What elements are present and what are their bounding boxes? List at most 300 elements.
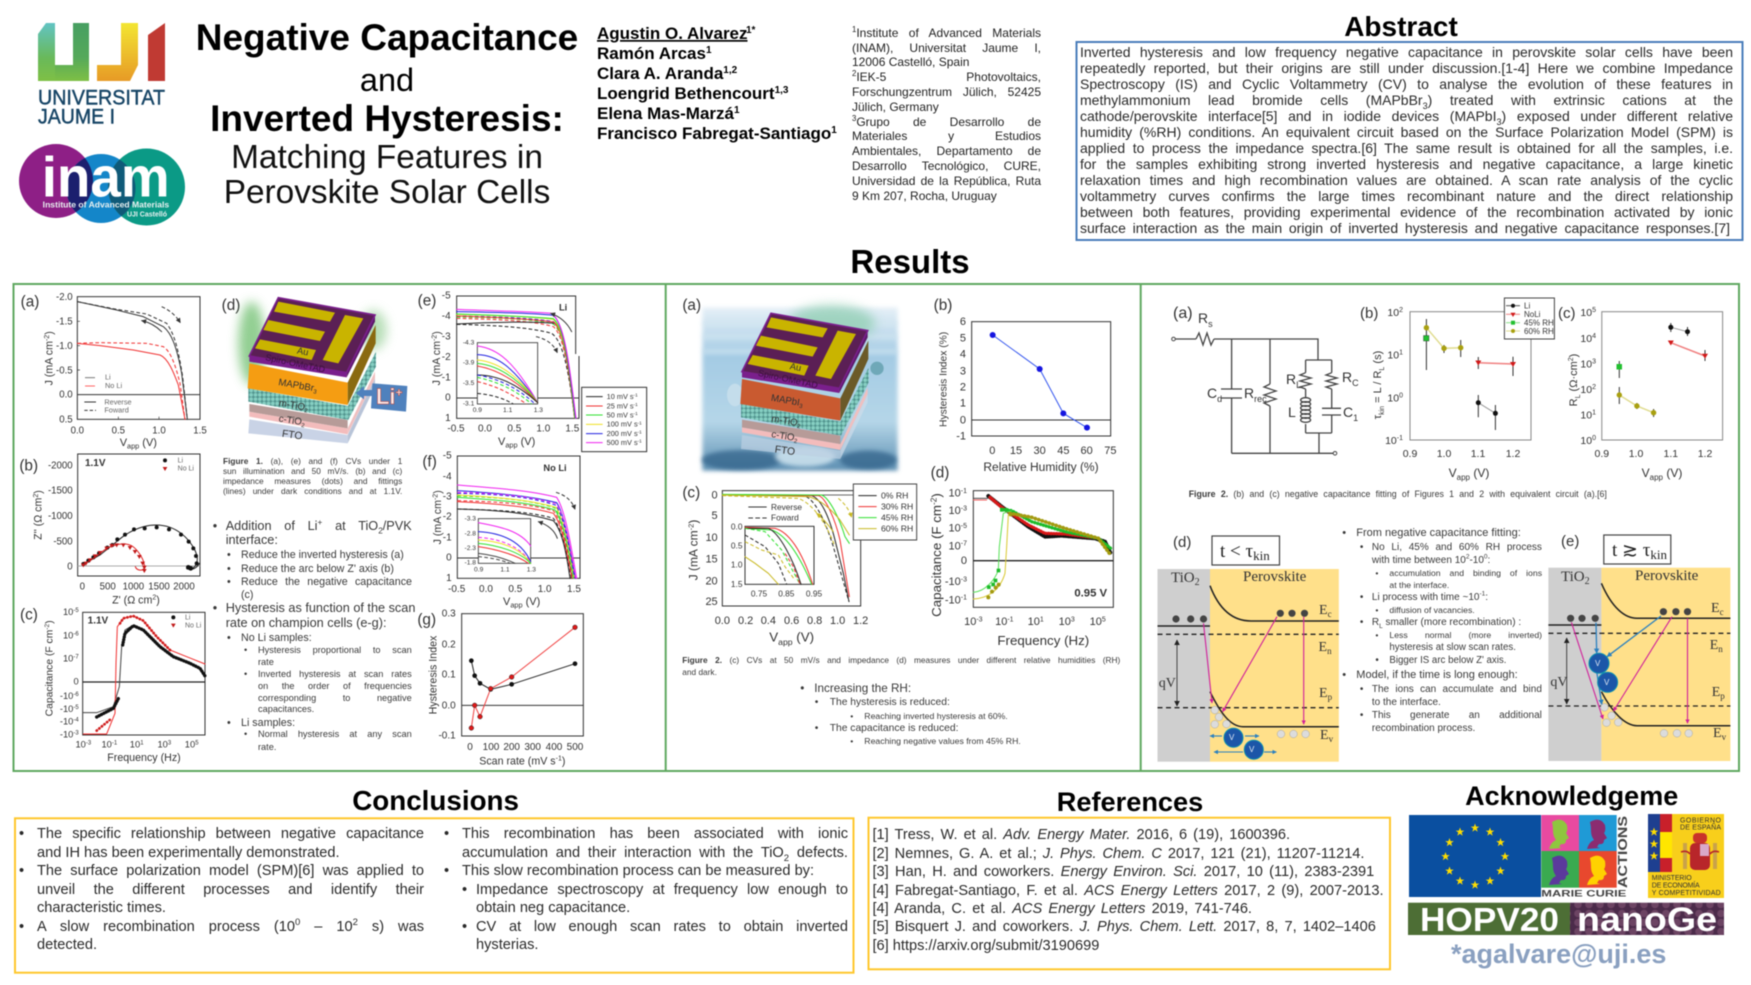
affiliations: (INAM), Universitat Jaume I, (852, 41, 1041, 55)
chart 2d: capacitance vs frequency: -3 (961, 576, 967, 583)
results panel frame (14, 284, 1739, 771)
chart 1c: capacitance vs frequency: -10 (60, 717, 73, 727)
chart 1f: CVs no Li: -4 (443, 471, 452, 482)
panel 3 bullet list: Less normal (more inverted) (1389, 630, 1542, 640)
logo: Marie Curie Actions (1541, 815, 1630, 900)
figure 2a: device in water: MAPbI (770, 393, 801, 409)
panel 3: equivalent circuit: (a) (1173, 305, 1193, 322)
panel 1 bullet list: • (244, 645, 247, 655)
abstract heading: Abstract (1344, 11, 1458, 42)
figure 2a: device in water: 2 (793, 439, 798, 445)
title: and (360, 62, 414, 98)
figure 2a: device in water: FTO (774, 444, 796, 458)
chart 3c: resistance RL: (c) (1558, 305, 1576, 322)
abstract text: Inverted hysteresis and low frequency negative capacitance in perovskite solar cells have been (1080, 44, 1733, 60)
conclusions right column: accumulation and their interaction with the TiO2 defects. (462, 844, 848, 863)
chart 1a: J-V curves: 0.5 (59, 414, 73, 425)
chart 1c: capacitance vs frequency: (c) (20, 606, 38, 623)
conclusions box (15, 818, 854, 973)
panel 3 bullet list: The ions can accumulate and bind (1372, 684, 1542, 695)
band diagram e: t greater than tau: E (1712, 685, 1720, 700)
conclusions right column: Impedance spectroscopy at frequency low enough to (476, 882, 848, 898)
panel 2 bullet list: The capacitance is reduced: (830, 723, 958, 734)
chart 2d: capacitance vs frequency: 10 (949, 523, 961, 535)
chart 2b: hysteresis index vs humidity: Relative Humidity (%) (983, 460, 1099, 474)
inset 2c: 0.0 (731, 521, 743, 531)
panel 1 bullet list: • (227, 632, 231, 644)
panel 3 bullet list: hysteresis at slow scan rates. (1389, 642, 1516, 653)
conclusions left column (18, 826, 424, 953)
chart 3c: resistance RL: V (1642, 466, 1650, 480)
panel 2 bullet list: • (815, 723, 818, 734)
legend 2c: 30% RH (881, 502, 913, 512)
chart 1f: CVs no Li: -2 (443, 512, 452, 523)
title: Perovskite Solar Cells (224, 174, 550, 211)
panel 3 bullet list: RL smaller (more recombination) : (1372, 617, 1521, 630)
chart 1a: J-V curves: 1.0 (152, 425, 166, 436)
chart 2c: CVs under humidity: (c) (682, 484, 700, 501)
legend 1e: -1 (634, 402, 638, 407)
chart 1g: hysteresis index vs scan rate (417, 609, 584, 767)
chart 1c: capacitance vs frequency: 10 (157, 739, 168, 749)
logo: Universitat Jaume I (38, 23, 165, 128)
chart 2b: hysteresis index vs humidity: Hysteresis Index (%) (938, 332, 949, 427)
panel 1 bullet list: capacitances. (258, 704, 314, 714)
chart 1c: capacitance vs frequency: ) (45, 620, 56, 624)
title (196, 17, 578, 211)
chart 1b: Nyquist plot: 2000 (173, 581, 195, 592)
panel 1 bullet list: Addition of Li+ at TiO2/PVK (226, 518, 412, 536)
legend 1e: 100 mV s (607, 420, 638, 429)
authors: 1,3 (775, 85, 789, 96)
band diagram d: t less than tau: E (1319, 686, 1328, 701)
chart 1e: CVs with Li: V (498, 436, 505, 448)
chart 3b: relaxation time: L (1379, 367, 1386, 371)
chart 2b: hysteresis index vs humidity: 15 (1010, 445, 1022, 457)
panel 3 bullet list: • (1360, 592, 1363, 602)
authors: 1,2 (723, 65, 738, 76)
chart 1f: CVs no Li (422, 450, 581, 610)
band diagram d: t less than tau (1158, 534, 1339, 762)
chart 2d: capacitance vs frequency: -7 (961, 541, 967, 548)
abstract text: relaxation times and high recombination values are obtained. A scan rate analysis of the cyclic (1080, 172, 1733, 188)
band diagram e: t greater than tau: E (1713, 726, 1722, 741)
affiliations: Desarrollo Tecnológico, CURE, (852, 159, 1041, 173)
chart 1f: CVs no Li: J (mA cm (432, 500, 444, 544)
chart 2b: hysteresis index vs humidity: 60 (1081, 445, 1093, 457)
panel 3: equivalent circuit: R (1342, 369, 1352, 385)
panel 3 bullet list: • (1375, 655, 1379, 666)
chart 1f: CVs no Li: 1.5 (567, 584, 581, 595)
chart 1g: hysteresis index vs scan rate: Scan rate (mV s (479, 755, 556, 767)
references box (868, 818, 1390, 969)
affiliations: Ambientales, Departamento de (852, 144, 1041, 158)
chart 2d: capacitance vs frequency: -1 (961, 488, 967, 495)
authors: 1* (746, 25, 756, 36)
chart 2d: capacitance vs frequency: -2 (929, 497, 939, 505)
chart 1c: capacitance vs frequency: Li (185, 614, 191, 621)
panel 3 bullet list: • (1360, 617, 1363, 628)
inset 2c: 0.75 (751, 589, 767, 599)
inset 1e: -3.5 (463, 380, 475, 387)
chart 3c: resistance RL: 10 (1580, 307, 1592, 319)
chart 3c: resistance RL: 0 (1592, 435, 1596, 442)
chart 3c: resistance RL: 2 (1592, 384, 1596, 391)
chart 1f: CVs no Li: 0.5 (508, 584, 523, 595)
band diagram d: t less than tau: 2 (1195, 577, 1200, 588)
chart 2d: capacitance vs frequency: 3 (1071, 616, 1075, 623)
chart 3b: relaxation time: = L / R (1372, 371, 1384, 406)
chart 1e: CVs with Li: -0.5 (447, 424, 465, 435)
chart 1a: J-V curves: -0.5 (56, 365, 73, 376)
chart 2c: CVs under humidity: Foward (771, 513, 799, 523)
panel 3 bullet list: • (1375, 630, 1378, 640)
chart 3b: relaxation time: 1 (1399, 350, 1403, 356)
figure 2a: device in water (682, 297, 898, 471)
band diagram e: t greater than tau: E (1711, 601, 1720, 616)
panel 1 bullet list: rate (258, 657, 274, 667)
band diagram e: t greater than tau: c (1720, 607, 1724, 617)
figure 1 caption: Figure 1. (a), (e) and (f) CVs under 1 (223, 456, 402, 466)
inset 2c: 0.95 (806, 589, 822, 599)
chart 3b: relaxation time: 0 (1399, 392, 1403, 400)
chart 1c: capacitance vs frequency: No Li (185, 622, 202, 629)
chart 3c: resistance RL: 10 (1580, 333, 1592, 345)
band diagram d: t less than tau: v (1329, 734, 1334, 744)
chart 1e: CVs with Li: -4 (442, 311, 451, 322)
chart 2b: hysteresis index vs humidity: 75 (1104, 445, 1116, 457)
panel 3 bullet list: • (1360, 542, 1363, 552)
chart 1a: J-V curves: (a) (21, 294, 39, 311)
legend 1e: 25 mV s (607, 401, 634, 410)
logo: INAM (19, 144, 185, 226)
chart 2d: capacitance vs frequency: ) (929, 493, 944, 498)
legend 1e: 500 mV s (607, 438, 638, 447)
chart 2b: hysteresis index vs humidity: 4 (960, 349, 966, 361)
chart 2c: CVs under humidity: 0.8 (807, 615, 822, 627)
inset 1f: 0.9 (474, 566, 484, 573)
affiliations: 1Institute of Advanced Materials (852, 25, 1041, 40)
band diagram d: t less than tau: E (1320, 728, 1329, 743)
chart 3c: resistance RL: 10 (1580, 435, 1592, 447)
chart 1g: hysteresis index vs scan rate: 0.1 (442, 670, 456, 681)
abstract text: humidity (%RH) conditions. An equivalent circuit based on the Surface Polarization Model (SPM) is (1080, 124, 1733, 140)
panel 3: equivalent circuit: C (1352, 378, 1359, 388)
band diagram e: t greater than tau: (e) (1561, 533, 1579, 550)
panel 1: device and right charts (222, 290, 647, 767)
band diagram d: t less than tau: V (1249, 745, 1255, 754)
panel 3 bullet list: • (1360, 710, 1363, 721)
chart 2c: CVs under humidity: 0.4 (761, 615, 776, 627)
chart 2b: hysteresis index vs humidity (934, 297, 1116, 474)
chart 2d: capacitance vs frequency: 0 (961, 555, 967, 567)
chart 1a: J-V curves: 0.5 (112, 425, 125, 436)
chart 1c: capacitance vs frequency: Capacitance (F cm (45, 630, 56, 716)
chart 2d: capacitance vs frequency: 10 (1090, 616, 1102, 628)
logo: nanoGe: nanoGe (1577, 901, 1717, 939)
chart 2d: capacitance vs frequency: (d) (931, 464, 949, 481)
chart 1f: CVs no Li: -3 (443, 491, 452, 502)
legend 1e: 50 mV s (607, 410, 634, 419)
figure 1d: device stack with Li+: m-TiO (278, 398, 306, 413)
chart 1g: hysteresis index vs scan rate: 200 (503, 742, 520, 753)
references list: [2] Nemnes, G. A. et al.; J. Phys. Chem. C 2017, 121 (21), 11207-11214. (872, 846, 1364, 862)
chart 2c: CVs under humidity: 5 (712, 510, 718, 522)
panel 1 bullet list (212, 518, 416, 752)
chart 1c: capacitance vs frequency: -5 (73, 608, 79, 614)
chart 3c: resistance RL: ) (1568, 354, 1580, 357)
chart 2c: CVs under humidity: 10 (705, 532, 718, 544)
panel 2 bullet list: • (800, 682, 804, 695)
band diagram e: t greater than tau: V (1595, 659, 1601, 668)
chart 2c: CVs under humidity: (V) (793, 630, 814, 645)
band diagram e: t greater than tau: v (1722, 732, 1727, 742)
chart 2d: capacitance vs frequency: 0.95 V (1074, 588, 1108, 600)
chart 2c: CVs under humidity: V (769, 630, 778, 645)
panel 1: left charts (19, 292, 207, 764)
band diagram d: t less than tau: t < τ (1220, 541, 1253, 562)
panel 2 bullet list: • (815, 697, 818, 708)
figure 1d: device stack with Li+ (222, 297, 407, 443)
chart 1b: Nyquist plot: -1500 (48, 486, 73, 497)
references list (872, 827, 1384, 954)
panel 3: equivalent circuit: C (1343, 404, 1353, 420)
chart 1b: Nyquist plot: -1000 (48, 511, 73, 522)
inset 1e: -3.9 (463, 360, 475, 367)
chart 2b: hysteresis index vs humidity: 0 (989, 445, 995, 457)
band diagram d: t less than tau: p (1328, 692, 1333, 702)
chart 2c: CVs under humidity: app (778, 637, 793, 647)
band diagram d: t less than tau: Perovskite (1243, 569, 1307, 585)
logo: HOPV20: HOPV20 (1420, 901, 1559, 938)
chart 2c: CVs under humidity: 15 (705, 554, 718, 566)
chart 1c: capacitance vs frequency: -5 (73, 705, 79, 711)
chart 2c: CVs under humidity: 25 (705, 596, 718, 608)
chart 2d: capacitance vs frequency: 1 (1040, 616, 1044, 623)
chart 1g: hysteresis index vs scan rate: 0 (467, 742, 473, 753)
chart 3c: resistance RL: (Ω·cm (1568, 361, 1580, 394)
chart 1g: hysteresis index vs scan rate: 0.3 (442, 609, 456, 620)
chart 3c: resistance RL: 1.1 (1663, 448, 1678, 460)
band diagram d: t less than tau: c (1328, 609, 1332, 619)
chart 1g: hysteresis index vs scan rate: 0.2 (442, 639, 456, 650)
band diagram d: t less than tau: qV (1159, 676, 1176, 691)
authors: 1 (734, 105, 740, 116)
logo: EU flag (1409, 815, 1541, 897)
figure 1 caption (222, 456, 403, 496)
chart 1e: CVs with Li: -5 (442, 290, 451, 301)
chart 3c: resistance RL: 1.2 (1698, 448, 1712, 460)
results heading: Results (850, 243, 970, 280)
conclusions right column: This recombination has been associated with ionic (462, 826, 848, 842)
chart 1c: capacitance vs frequency: 10 (130, 739, 140, 749)
panel 2 bullet list: Reaching negative values from 45% RH. (864, 736, 1021, 746)
figure 1d: device stack with Li+: (d) (222, 297, 240, 314)
chart 1f: CVs no Li: -5 (443, 450, 452, 461)
abstract text: voltammetry curves confirms the large times recombinant nature and the direct relationship (1080, 188, 1733, 204)
logo: Gobierno de España (1648, 814, 1724, 898)
chart 2c: CVs under humidity: 0 (712, 489, 718, 501)
chart 1a: J-V curves: V (120, 437, 127, 449)
chart 3b: relaxation time: 10 (1387, 392, 1399, 404)
chart 3b: relaxation time: 10 (1387, 350, 1399, 362)
abstract text: between both features, providing experimental evidence of the recombination activated by ionic (1080, 204, 1733, 220)
chart 3c: resistance RL: L (1575, 394, 1582, 398)
conclusions left column: unveil the different processes and identify their (37, 882, 424, 898)
figure 2a: device in water: 2 (796, 424, 801, 431)
chart 1g: hysteresis index vs scan rate: Hysteresis Index (428, 635, 440, 714)
chart 3b: relaxation time: 2 (1399, 307, 1403, 314)
figure 2a: device in water: (a) (682, 297, 701, 314)
conclusions right column: • (462, 918, 467, 934)
references list: [4] Fabregat-Santiago, F. et al. ACS Energy Letters 2017, 2 (9), 2007-2013. (872, 883, 1384, 899)
chart 2d: capacitance vs frequency (929, 464, 1113, 648)
panel 1 bullet list: rate on champion cells (e-g): (226, 616, 386, 630)
conclusions left column: The surface polarization model (SPM)[6] was applied to (37, 863, 424, 879)
panel 1 bullet list: Reduce the inverted hysteresis (a) (241, 549, 404, 561)
figure 2a: device in water: Au (789, 361, 802, 373)
panel 3 bullet list: accumulation and binding of ions (1389, 568, 1542, 578)
panel 3 bullet list: • (1375, 568, 1378, 578)
panel 1 bullet list: • (213, 601, 217, 615)
chart 2c: CVs under humidity (682, 484, 917, 647)
conclusions left column: A slow recombination process (100 – 102 s) was (37, 917, 424, 934)
authors: Agustin O. Alvarez (597, 24, 748, 43)
panel 1 bullet list: Reduce the negative capacitance (241, 576, 412, 588)
chart 3b: relaxation time: V (1449, 466, 1457, 480)
inset 2c: 1.5 (731, 579, 743, 589)
figure 2 caption (682, 655, 1120, 677)
band diagram e: t greater than tau: n (1718, 644, 1723, 654)
legend 2c: 0% RH (881, 491, 908, 501)
panel 3 bullet list: • (1375, 605, 1378, 615)
inset 2c: 0.85 (778, 589, 795, 599)
chart 1c: capacitance vs frequency: -3 (73, 731, 79, 737)
chart 3c: resistance RL: 4 (1592, 333, 1596, 340)
panel 1 bullet list: • (227, 576, 231, 588)
panel 1 bullet list: • (244, 729, 247, 739)
logo: Gobierno de España: MINISTERIO (1652, 875, 1692, 882)
abstract text: applied to process the impedance spectra.[6] The same result is obtained for all the samples, i.e. (1080, 140, 1733, 156)
conclusions left column: • (19, 918, 24, 934)
chart 2d: capacitance vs frequency: 5 (1102, 616, 1106, 623)
chart 1f: CVs no Li: (V) (523, 596, 540, 608)
chart 1c: capacitance vs frequency: -6 (73, 631, 79, 637)
chart 1g: hysteresis index vs scan rate: ) (562, 755, 565, 767)
panel 3 bullet list: Li process with time ~10-1: (1372, 590, 1488, 602)
authors: Francisco Fabregat-Santiago (597, 124, 831, 143)
logo: Marie Curie Actions: MARIE CURIE (1541, 889, 1626, 900)
chart 3b: relaxation time: 1.1 (1471, 448, 1485, 460)
chart 3c: resistance RL: app (1650, 473, 1664, 482)
chart 1b: Nyquist plot: ) (33, 490, 45, 494)
chart 2d: capacitance vs frequency: -10 (945, 576, 961, 588)
affiliations: Jülich, Germany (852, 100, 939, 114)
authors (597, 24, 837, 143)
conclusions right column: This slow recombination process can be measured by: (462, 863, 814, 879)
panel 3 bullet list: Model, if the time is long enough: (1356, 669, 1518, 681)
legend 1e (582, 387, 647, 452)
chart 1g: hysteresis index vs scan rate: 300 (524, 742, 541, 753)
figure 1d: device stack with Li+: 3 (313, 389, 318, 396)
inset 1e: 1.3 (534, 407, 543, 414)
figure 2a: device in water: 3 (799, 404, 803, 410)
authors: Loengrid Bethencourt (597, 84, 775, 103)
panel 3 bullet list: No Li, 45% and 60% RH process (1372, 542, 1542, 552)
panel 3 bullet list: • (1342, 669, 1346, 681)
panel 3: equivalent circuit: L (1296, 380, 1301, 390)
conclusions right column: • (462, 882, 467, 898)
chart 1b: Nyquist plot: (b) (19, 458, 38, 475)
chart 1g: hysteresis index vs scan rate: 400 (546, 742, 563, 753)
figure 1d: device stack with Li+: FTO (281, 429, 303, 442)
panel 3 bullet list: • (1360, 684, 1363, 695)
band diagram e: t greater than tau: 2 (1585, 576, 1590, 587)
chart 1f: CVs no Li: 0.0 (479, 584, 493, 595)
figure 1d: device stack with Li+: Au (296, 345, 309, 357)
chart 1e: CVs with Li: (V) (518, 436, 535, 448)
band diagram e: t greater than tau: Perovskite (1635, 568, 1699, 584)
band diagram d: t less than tau: n (1327, 646, 1332, 656)
band diagram e: t greater than tau: qV (1550, 675, 1568, 690)
legend 3: 60% RH (1524, 327, 1554, 336)
inset 1f: -1.8 (465, 560, 476, 567)
band diagram e: t greater than tau: kin (1650, 547, 1667, 562)
chart 1a: J-V curves: (V) (139, 437, 157, 449)
chart 3c: resistance RL: 3 (1592, 358, 1596, 366)
chart 3b: relaxation time: 0.9 (1403, 448, 1417, 460)
chart 3c: resistance RL: 10 (1580, 410, 1592, 422)
panel 2: humidity figures (682, 297, 1116, 648)
affiliations: 12006 Castelló, Spain (852, 55, 969, 69)
panel 1 bullet list: Reduce the arc below Z' axis (b) (241, 563, 394, 575)
conclusions left column: and IH has been experimentally demonstrated. (37, 844, 340, 860)
references list: [3] Han, H. and coworkers. Energy Environ. Sci. 2017, 10 (11), 2383-2391 (872, 864, 1374, 880)
chart 1b: Nyquist plot (19, 454, 200, 606)
chart 1a: J-V curves: 1.5 (193, 425, 207, 436)
abstract text: repeatedly reported, but their origins are still under discussion.[1-4] Here we combine Impedance (1080, 60, 1733, 76)
chart 1b: Nyquist plot: 0 (67, 561, 73, 572)
band diagram e: t greater than tau: t ≳ τ (1612, 540, 1650, 561)
chart 1c: capacitance vs frequency: -2 (44, 623, 51, 630)
chart 1c: capacitance vs frequency: -10 (60, 691, 73, 701)
chart 1e: CVs with Li: -1 (442, 372, 451, 383)
logo: Marie Curie Actions: ACTIONS (1616, 816, 1630, 888)
panel 1 bullet list: corresponding to negative (258, 693, 412, 703)
chart 2d: capacitance vs frequency: -3 (976, 616, 983, 623)
panel 3 bullet list: • (1342, 527, 1346, 539)
inset 1e (463, 339, 543, 414)
figure 1d: device stack with Li+: + (396, 386, 403, 400)
chart 1a: J-V curves: -2 (44, 335, 51, 341)
chart 2b: hysteresis index vs humidity: 5 (960, 332, 966, 344)
chart 1c: capacitance vs frequency: -10 (60, 704, 73, 714)
chart 1b: Nyquist plot: 2 (152, 595, 156, 602)
band diagram e: t greater than tau: V (1604, 678, 1610, 687)
panel 3: equivalent circuit: 1 (1353, 413, 1358, 423)
chart 1c: capacitance vs frequency: 10 (185, 739, 195, 749)
chart 1a: J-V curves: -2.0 (56, 292, 73, 303)
legend 1e: 200 mV s (607, 429, 638, 438)
inset 1e: -3.1 (463, 400, 475, 407)
chart 1a: J-V curves: ) (44, 331, 56, 335)
references list: [6] https://arxiv.org/submit/3190699 (872, 938, 1099, 954)
figure 1d: device stack with Li+: Li (376, 384, 396, 409)
authors: Ramón Arcas (597, 44, 706, 63)
band diagram d: t less than tau: E (1318, 640, 1327, 655)
panel 3: equivalent circuit: R (1198, 310, 1208, 326)
affiliations: Forschungzentrum Jülich, 52425 (852, 85, 1041, 99)
